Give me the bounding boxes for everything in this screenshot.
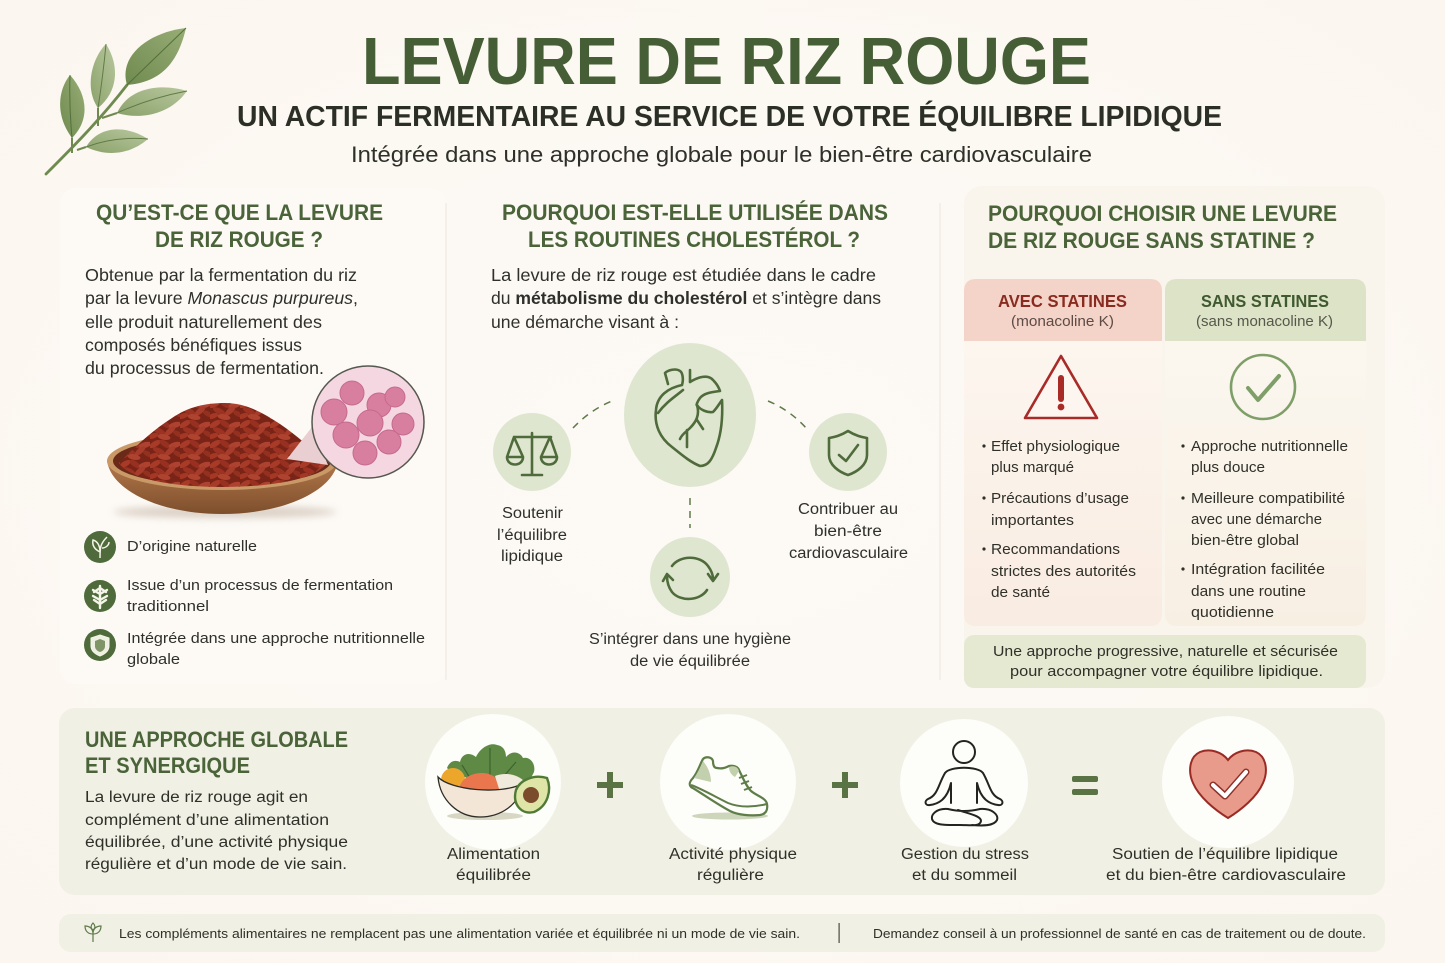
icon: leaf branch [46, 28, 187, 174]
label: soutenir: lipidique [501, 548, 563, 565]
label: gestion du stress: Gestion du stress [901, 846, 1029, 863]
heading: sans statine: POURQUOI CHOISIR UNE LEVURE [988, 201, 1337, 226]
label: soutenir: Soutenir [502, 505, 563, 522]
text: routines: du métabolisme du cholestérol et s’intègre dans [491, 288, 881, 308]
label: contribuer: Contribuer au [798, 501, 898, 518]
heading: approche globale [85, 727, 348, 778]
list: benefits: traditionnel [127, 598, 209, 615]
list: sans statines points [1181, 438, 1348, 621]
icon: shield [84, 629, 116, 661]
text: synergie: complément d’une alimentation [85, 812, 329, 829]
list: sans statines points: quotidienne [1191, 604, 1274, 621]
icon: heart [624, 343, 756, 487]
text: definition: Obtenue par la fermentation du riz [85, 265, 357, 285]
heading: approche globale: UNE APPROCHE GLOBALE [85, 727, 348, 752]
label: activité physique [669, 846, 797, 884]
list: benefits: Intégrée dans une approche nutritionnelle [127, 630, 425, 647]
panel: pourquoi est-elle utilisée [491, 200, 908, 670]
heading: pourquoi utilisée: POURQUOI EST-ELLE UTILISÉE DANS [502, 200, 888, 225]
icon: equals [1072, 776, 1098, 795]
list: sans statines points: bien-être global [1191, 532, 1299, 549]
label: soutien [1106, 846, 1346, 884]
label: soutien: et du bien-être cardiovasculaire [1106, 867, 1346, 884]
label: s'intégrer: de vie équilibrée [630, 653, 750, 670]
icon: plus [597, 772, 623, 798]
connectors: dashed lines [573, 401, 807, 528]
list: sans statines points: Approche nutritionnelle [1191, 438, 1348, 455]
label: contribuer [789, 501, 908, 562]
list: avec statines points: importantes [991, 512, 1074, 529]
list: sans statines points: dans une routine [1191, 583, 1306, 600]
list: avec statines points: Recommandations [991, 541, 1120, 558]
label: soutenir: l’équilibre [497, 527, 567, 544]
illustration: bowl of red rice [107, 403, 338, 518]
text: routines: La levure de riz rouge est étudiée dans le cadre [491, 265, 876, 285]
list: avec statines points: plus marqué [991, 459, 1074, 476]
column: avec statines: (monacoline K) [1011, 314, 1114, 330]
callout: approche progressive: pour accompagner votre équilibre lipidique. [1010, 663, 1323, 680]
heading: qu'est-ce que: QU’EST-CE QUE LA LEVURE [96, 200, 383, 225]
text: synergie: équilibrée, d’une activité physique [85, 834, 348, 851]
icon: running shoe [660, 714, 796, 850]
label: contribuer: bien-être [814, 523, 882, 540]
list: avec statines points: Précautions d’usage [991, 490, 1129, 507]
label: contribuer: cardiovasculaire [789, 545, 908, 562]
panel: pourquoi sans statine [964, 186, 1385, 688]
icon: check circle [1231, 355, 1295, 419]
callout: approche progressive: Une approche progressive, naturelle et sécurisée [993, 643, 1338, 660]
icon: heart with check [1162, 716, 1294, 848]
heading: qu'est-ce que: DE RIZ ROUGE ? [155, 227, 323, 252]
callout: approche progressive [964, 635, 1366, 688]
list: sans statines points: plus douce [1191, 459, 1265, 476]
list: benefits: globale [127, 651, 180, 668]
list: avec statines points: Effet physiologique [991, 438, 1120, 455]
icon: wheat [84, 580, 116, 612]
tagline: Intégrée dans une approche globale pour le bien-être cardiovasculaire [351, 142, 1092, 167]
text: routines [491, 265, 881, 332]
heading: pourquoi utilisée [502, 200, 888, 252]
list: sans statines points: Intégration facilitée [1191, 561, 1325, 578]
panel: qu'est-ce que la levure [60, 188, 446, 684]
icon: scale [493, 413, 571, 491]
label: gestion du stress [901, 846, 1029, 884]
column: sans statines: (sans monacoline K) [1196, 314, 1333, 330]
label: s'intégrer [589, 631, 791, 670]
label: activité physique: Activité physique [669, 846, 797, 863]
icon: cycle arrows [650, 537, 730, 617]
list: benefits: Issue d’un processus de fermentation [127, 577, 393, 594]
column: avec statines [964, 279, 1162, 626]
panel: footer notice [59, 914, 1385, 952]
text: advice: Demandez conseil à un professionnel de santé en cas de traitement ou de doute. [873, 926, 1366, 941]
text: synergie [85, 789, 348, 873]
icon: warning triangle [1025, 356, 1097, 418]
list: benefits [84, 531, 425, 668]
list: benefits: D’origine naturelle [127, 538, 257, 555]
text: definition: elle produit naturellement des [85, 312, 322, 332]
text: definition: par la levure Monascus purpureus, [85, 288, 358, 308]
icon: plant [84, 531, 116, 563]
list: sans statines points: Meilleure compatibilité [1191, 490, 1345, 507]
label: soutien: Soutien de l’équilibre lipidique [1112, 846, 1338, 863]
label: soutenir [497, 505, 567, 565]
label: s'intégrer: S’intégrer dans une hygiène [589, 631, 791, 648]
icon: sprout [85, 923, 101, 942]
heading: pourquoi utilisée: LES ROUTINES CHOLESTÉROL ? [528, 227, 860, 252]
column: sans statines: SANS STATINES [1201, 291, 1329, 311]
icon: shield check [809, 413, 887, 491]
text: synergie: régulière et d’un mode de vie sain. [85, 856, 347, 873]
heading: sans statine [988, 201, 1337, 253]
illustration: magnified yeast cells [287, 366, 424, 478]
text: definition: du processus de fermentation. [85, 358, 324, 378]
text: definition: composés bénéfiques issus [85, 335, 302, 355]
label: alimentation [447, 846, 540, 884]
text: definition [85, 265, 358, 378]
column: sans statines [1165, 279, 1366, 626]
list: avec statines points: strictes des autorités [991, 563, 1136, 580]
label: alimentation: Alimentation [447, 846, 540, 863]
heading: sans statine: DE RIZ ROUGE SANS STATINE ? [988, 228, 1315, 253]
heading: qu'est-ce que [96, 200, 383, 252]
list: sans statines points: avec une démarche [1191, 511, 1322, 528]
panel: approche globale [59, 708, 1385, 895]
list: avec statines points [982, 438, 1136, 601]
text: disclaimer: Les compléments alimentaires ne remplacent pas une alimentation variée et équilibrée ni un mode de vie sain. [119, 926, 800, 941]
label: alimentation: équilibrée [456, 867, 531, 884]
label: gestion du stress: et du sommeil [912, 867, 1017, 884]
icon: food bowl [425, 714, 561, 850]
title: LEVURE DE RIZ ROUGE [362, 24, 1091, 99]
heading: approche globale: ET SYNERGIQUE [85, 753, 250, 778]
subtitle: UN ACTIF FERMENTAIRE AU SERVICE DE VOTRE ÉQUILIBRE LIPIDIQUE [237, 99, 1222, 133]
icon: plus [832, 772, 858, 798]
text: routines: une démarche visant à : [491, 312, 679, 332]
label: activité physique: régulière [697, 867, 764, 884]
column: avec statines: AVEC STATINES [998, 291, 1127, 311]
icon: meditation [900, 719, 1028, 847]
list: avec statines points: de santé [991, 584, 1050, 601]
text: synergie: La levure de riz rouge agit en [85, 789, 308, 806]
